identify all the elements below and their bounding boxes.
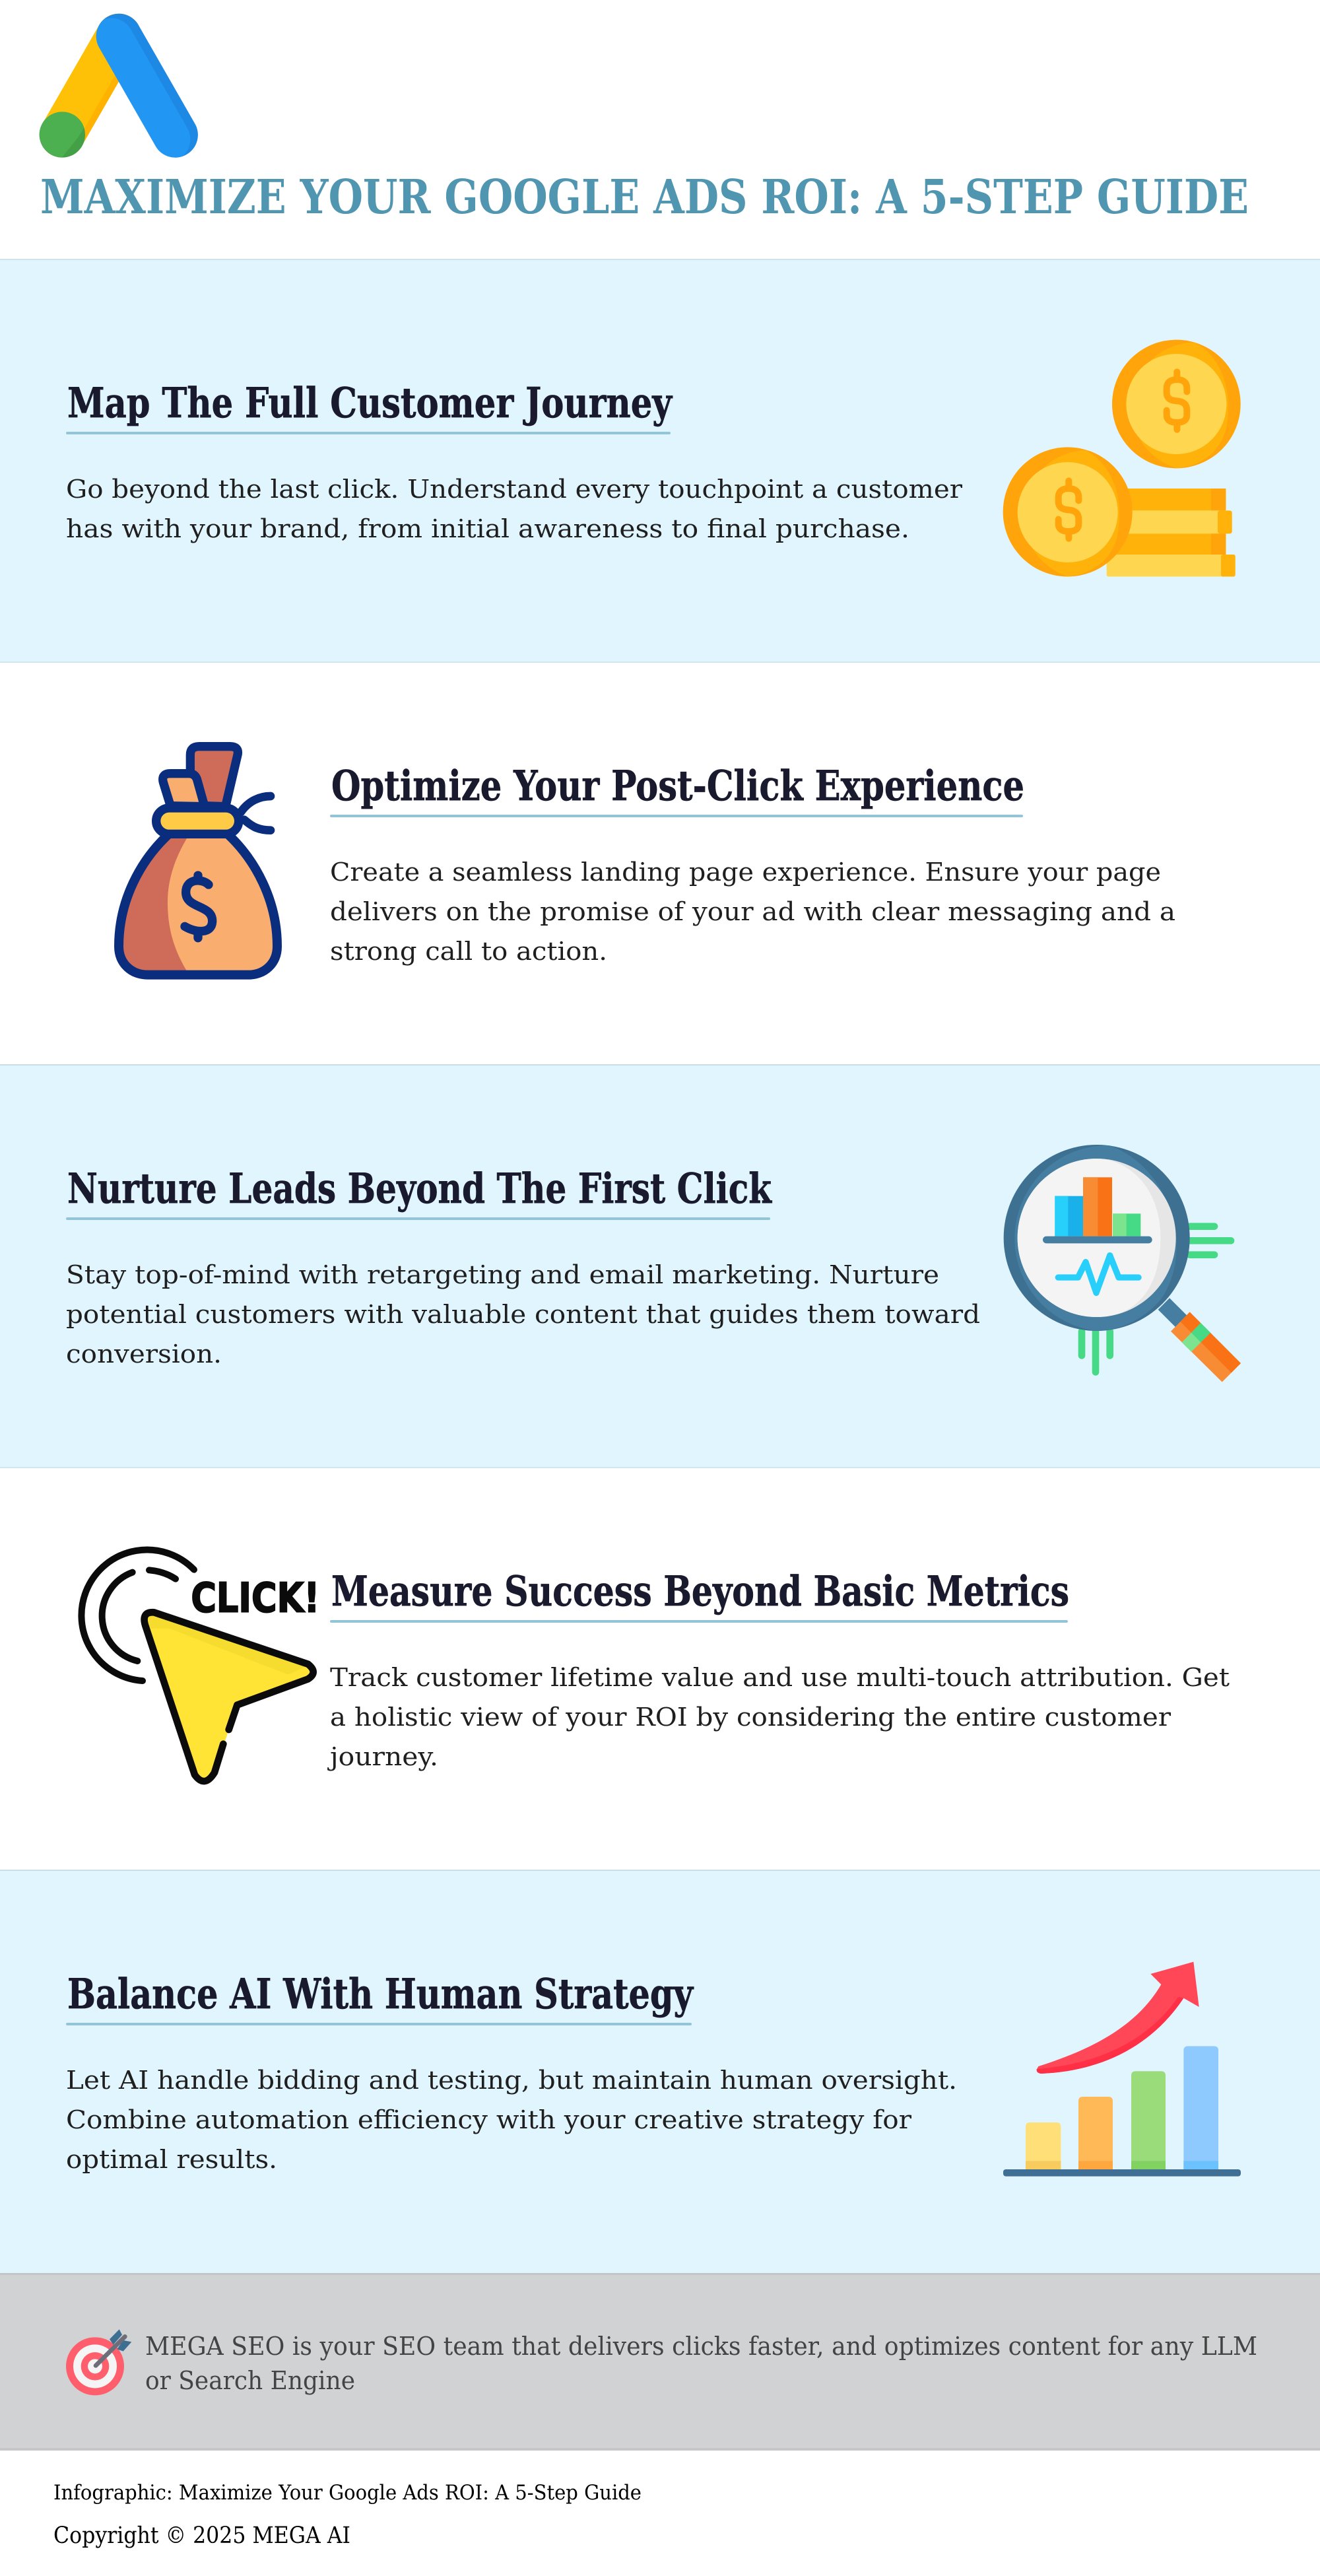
text block: step 1 [66,475,963,543]
panel: step 4 [0,1467,1320,1870]
header [40,13,1247,214]
text block: step 4: a holistic view of your ROI by considering the entire customer [330,1703,1172,1732]
icon: coins [1003,340,1241,576]
text block: step 5: optimal results. [66,2145,277,2174]
text block: step 5 [66,2066,957,2174]
icon: magnifying glass [1004,1145,1241,1382]
text block: MEGA SEO: MEGA SEO is your SEO team that delivers clicks faster, and optimizes content for any LLM [145,2332,1257,2361]
text block: step 3: potential customers with valuable content that guides them toward [66,1300,980,1329]
heading: step 3: Nurture Leads Beyond The First Click [67,1164,772,1213]
text block: step 2: Create a seamless landing page experience. Ensure your page [330,858,1161,887]
heading: step 2: Optimize Your Post-Click Experience [331,761,1024,810]
text block: step 3 [66,1260,980,1369]
text block: MEGA SEO: or Search Engine [145,2366,355,2395]
text block: step 3: conversion. [66,1339,222,1369]
footer caption: Infographic: Maximize Your Google Ads ROI: A 5-Step Guide [53,2481,642,2505]
text block: step 5: Combine automation efficiency with your creative strategy for [66,2105,912,2134]
text block: MEGA SEO [145,2332,1257,2395]
text block: step 4: journey. [327,1742,438,1771]
icon: growth chart [1003,1962,1241,2177]
panel: step 3 [0,1064,1320,1467]
icon: money bag [119,747,277,975]
text block: step 4: Track customer lifetime value and use multi-touch attribution. Get [330,1663,1230,1692]
text block: step 1: has with your brand, from initial awareness to final purchase. [66,514,909,543]
text block: step 4 [327,1663,1230,1771]
text block: step 2 [330,858,1175,966]
heading: step 5: Balance AI With Human Strategy [67,1969,694,2018]
icon: click cursor: CLICK! [191,1575,319,1622]
footer [0,2451,1320,2576]
panel: step 5 [0,1870,1320,2273]
panel: step 1 [0,259,1320,661]
icon: Google Ads logo [40,13,198,158]
heading: step 1: Map The Full Customer Journey [67,378,673,427]
text block: step 5: Let AI handle bidding and testing, but maintain human oversight. [66,2066,957,2095]
text block: step 3: Stay top-of-mind with retargeting and email marketing. Nurture [66,1260,939,1289]
heading: step 4: Measure Success Beyond Basic Metrics [331,1567,1069,1615]
text block: step 2: delivers on the promise of your ad with clear messaging and a [330,897,1175,926]
panel: MEGA SEO callout [0,2273,1320,2451]
icon: click cursor [81,1550,319,1781]
text block: step 1: Go beyond the last click. Understand every touchpoint a customer [66,475,963,504]
text block: step 2: strong call to action. [330,937,607,966]
copyright: Copyright © 2025 MEGA AI [53,2523,350,2549]
icon: target with arrow [66,2329,131,2395]
panel: step 2 [0,661,1320,1064]
